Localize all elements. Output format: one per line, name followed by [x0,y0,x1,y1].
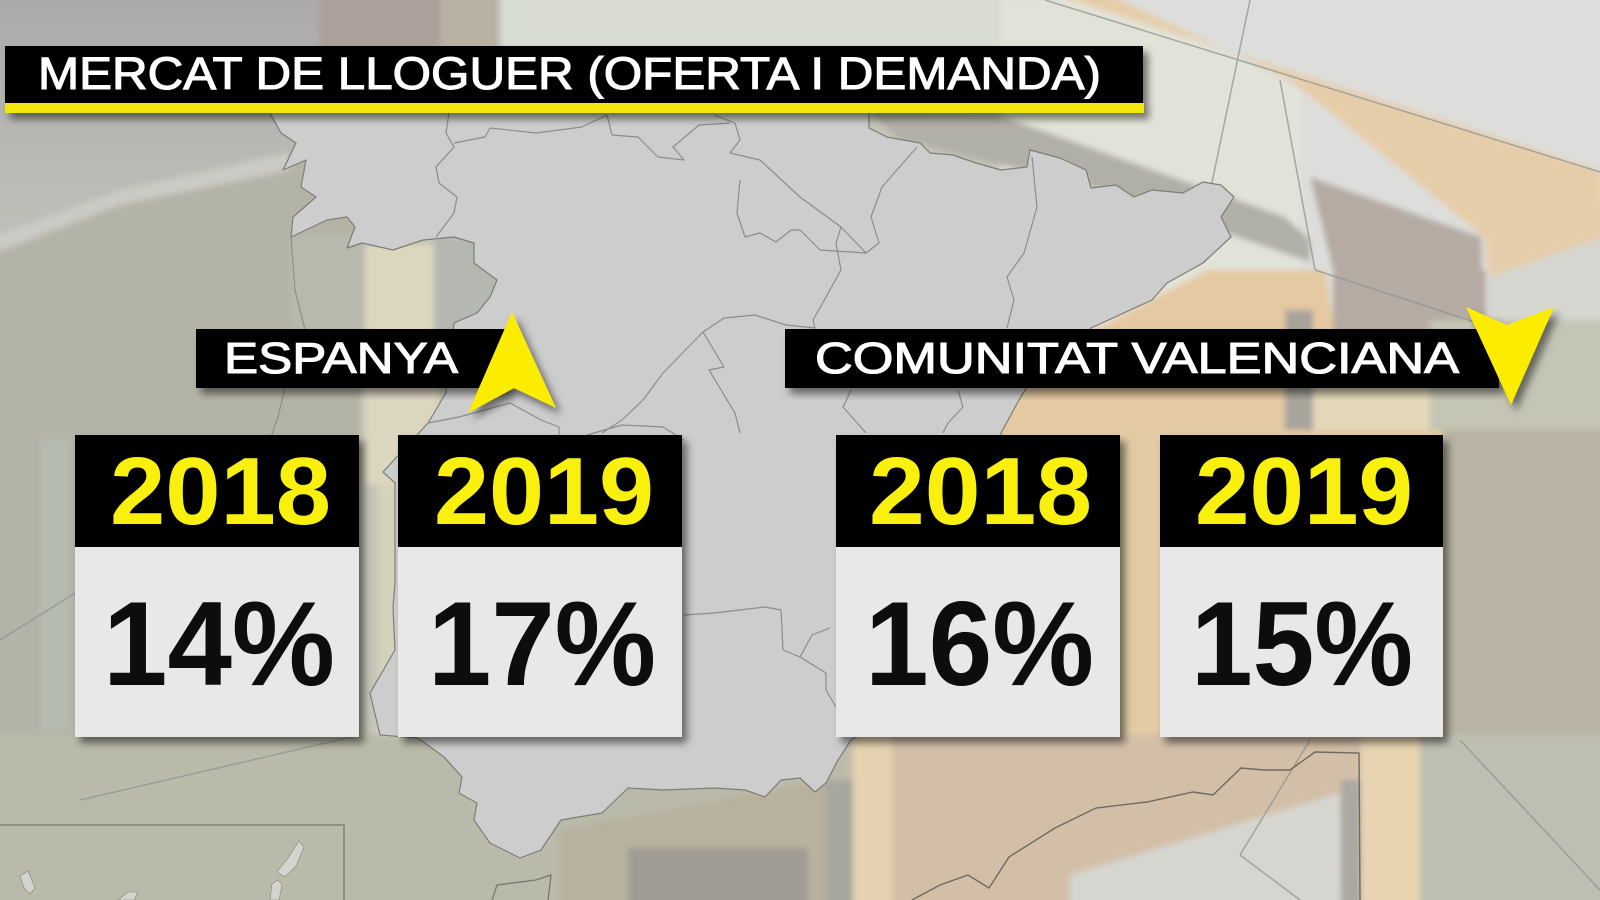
title bar [5,46,1143,103]
value: 14% [103,577,335,711]
value panel [1160,547,1443,737]
year header [398,435,682,547]
title text: MERCAT DE LLOGUER (OFERTA I DEMANDA) [38,48,1101,99]
year header [1160,435,1443,547]
value: 15% [1191,577,1413,711]
mainland silhouette [270,105,1234,858]
card: Espanya 2018 [75,435,359,737]
value: 16% [865,577,1094,711]
yellow underline [5,103,1144,113]
Canary Islands inset [0,825,344,900]
icon: yellow down arrow [1466,307,1554,405]
Espanya label bar [196,329,506,388]
year: 2019 [1195,438,1413,545]
title banner [5,46,1144,113]
icon: yellow up arrow [468,312,556,413]
Comunitat Valenciana label bar [785,329,1499,388]
Espanya label bar: ESPANYA [224,334,459,383]
regional borders [428,113,1037,707]
year header [836,435,1120,547]
value panel [75,547,359,737]
card: Espanya 2019 [398,435,682,737]
year: 2019 [434,438,654,545]
right side: upper wall and sky [1000,0,1600,350]
Ceuta and north Africa coast [492,875,551,900]
value panel [836,547,1120,737]
label: Comunitat Valenciana [785,307,1554,405]
year: 2018 [110,438,331,545]
value: 17% [428,577,656,711]
islands [20,841,304,900]
right side: lower facade [1119,430,1600,750]
map of Spain [270,105,1360,900]
Portuguese coast line [270,237,305,440]
year: 2018 [869,438,1092,545]
value panel [398,547,682,737]
card: Comunitat Valenciana 2018 [836,435,1120,737]
Comunitat Valenciana label bar: COMUNITAT VALENCIANA [815,334,1460,383]
year header [75,435,359,547]
label: Espanya [196,312,556,413]
card: Comunitat Valenciana 2019 [1160,435,1443,737]
